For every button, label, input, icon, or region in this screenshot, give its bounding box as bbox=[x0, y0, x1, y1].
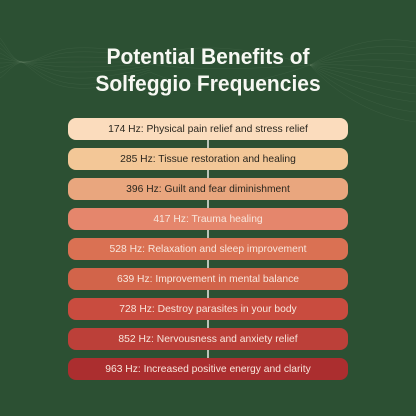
bar: 174 Hz bbox=[68, 118, 348, 140]
bar: 285 Hz bbox=[68, 148, 348, 170]
bar: 528 Hz: 528 Hz: Relaxation and sleep improvement bbox=[110, 244, 306, 254]
bar: 417 Hz: 417 Hz: Trauma healing bbox=[153, 214, 263, 224]
bar: 396 Hz: 396 Hz: Guilt and fear diminishment bbox=[126, 184, 290, 194]
bar: 396 Hz bbox=[68, 178, 348, 200]
bar: 852 Hz bbox=[68, 328, 348, 350]
bar: 852 Hz: 852 Hz: Nervousness and anxiety relief bbox=[118, 334, 298, 344]
bar: 285 Hz: 285 Hz: Tissue restoration and healing bbox=[120, 154, 296, 164]
bar: 639 Hz bbox=[68, 268, 348, 290]
title bbox=[95, 44, 321, 96]
bar: 174 Hz: 174 Hz: Physical pain relief and stress relief bbox=[108, 124, 308, 134]
bar: 639 Hz: 639 Hz: Improvement in mental balance bbox=[117, 274, 299, 284]
bar: 728 Hz bbox=[68, 298, 348, 320]
title: Solfeggio Frequencies bbox=[95, 70, 321, 96]
bar: 528 Hz bbox=[68, 238, 348, 260]
connector lines bbox=[207, 140, 209, 358]
bar: 963 Hz: 963 Hz: Increased positive energy and clarity bbox=[105, 364, 311, 374]
bar: 963 Hz bbox=[68, 358, 348, 380]
bar: 728 Hz: 728 Hz: Destroy parasites in your body bbox=[119, 304, 297, 314]
title: Potential Benefits of bbox=[106, 44, 310, 69]
bar: 417 Hz bbox=[68, 208, 348, 230]
